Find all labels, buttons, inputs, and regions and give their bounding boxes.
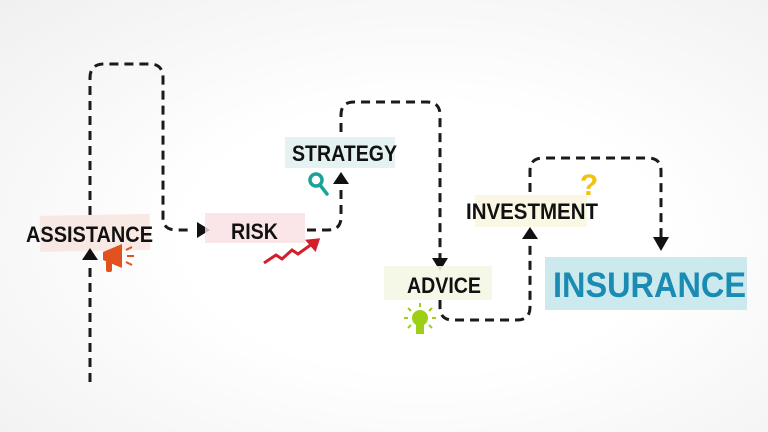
label: INVESTMENT: INVESTMENT (466, 199, 599, 224)
label: ADVICE: ADVICE (407, 273, 481, 298)
arrow: down into insurance (653, 237, 669, 251)
icon: question mark: ? (580, 169, 598, 202)
label: RISK: RISK (231, 219, 278, 244)
label: ASSISTANCE: ASSISTANCE (26, 222, 153, 247)
arrow: up into investment (522, 227, 538, 239)
arrow: right into risk (197, 222, 210, 238)
icon: magnifier (310, 174, 327, 194)
icon: lightbulb (404, 303, 436, 334)
label: RISK (205, 213, 305, 244)
arrow: up into assistance (82, 248, 98, 260)
label: INSURANCE: INSURANCE (553, 266, 746, 305)
label: ADVICE (384, 266, 492, 300)
label: STRATEGY (285, 137, 397, 168)
icon: rising red arrow (264, 240, 318, 263)
arrow: up into strategy (333, 172, 349, 184)
icon: megaphone (103, 244, 134, 272)
arrow: down into advice (432, 258, 448, 271)
label: ASSISTANCE (26, 214, 153, 252)
label: STRATEGY: STRATEGY (292, 141, 397, 166)
label: INSURANCE (545, 257, 747, 310)
